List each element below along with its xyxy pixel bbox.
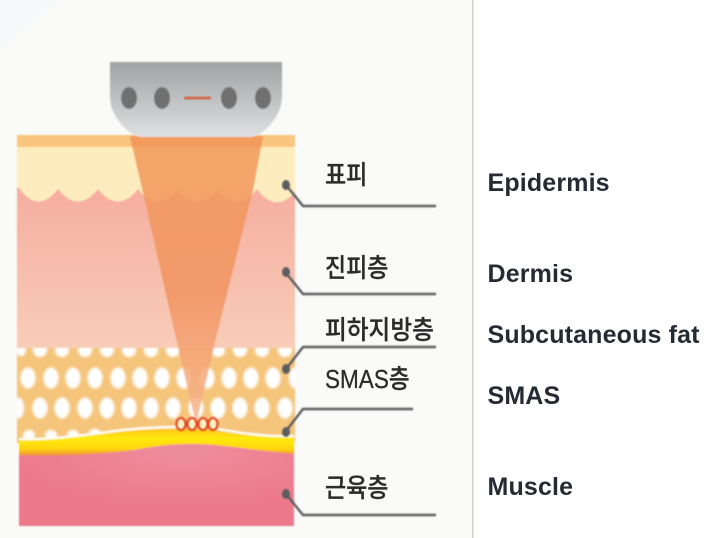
- label: 피하지방층: 피하지방층: [325, 316, 434, 345]
- skin layers diagram: [12, 62, 301, 526]
- leader: SMAS: [282, 409, 413, 437]
- layer: top skin strip: [17, 135, 295, 147]
- label: 표피: 표피: [325, 161, 367, 190]
- thermal coagulation points: [176, 418, 218, 430]
- layer: dermis: [17, 185, 295, 348]
- layer: epidermis with scalloped edge: [17, 147, 295, 202]
- English labels: [488, 169, 700, 501]
- ultrasound probe head: [110, 62, 282, 137]
- leader: dermis: [282, 267, 436, 294]
- background panel: [0, 0, 474, 538]
- label: Muscle: Muscle: [488, 473, 573, 501]
- focused ultrasound beam: [130, 137, 263, 420]
- layer: subcutaneous fat with dots: [12, 343, 301, 443]
- layer: SMAS yellow band: [19, 427, 294, 456]
- label: 근육층: 근육층: [325, 474, 388, 503]
- leader lines: [282, 180, 436, 515]
- Korean labels: [325, 161, 434, 503]
- label: SMAS층: SMAS층: [325, 364, 410, 394]
- beam top strip: [130, 136, 263, 147]
- label: Epidermis: Epidermis: [488, 169, 610, 197]
- label: Subcutaneous fat: Subcutaneous fat: [488, 321, 700, 349]
- leader: subcutaneous fat: [282, 347, 436, 374]
- leader: epidermis: [282, 180, 436, 206]
- leader: muscle: [282, 489, 436, 515]
- label: Dermis: Dermis: [488, 260, 573, 288]
- label: 진피층: 진피층: [325, 254, 388, 283]
- label: SMAS: SMAS: [488, 382, 560, 410]
- layer: muscle: [19, 440, 294, 526]
